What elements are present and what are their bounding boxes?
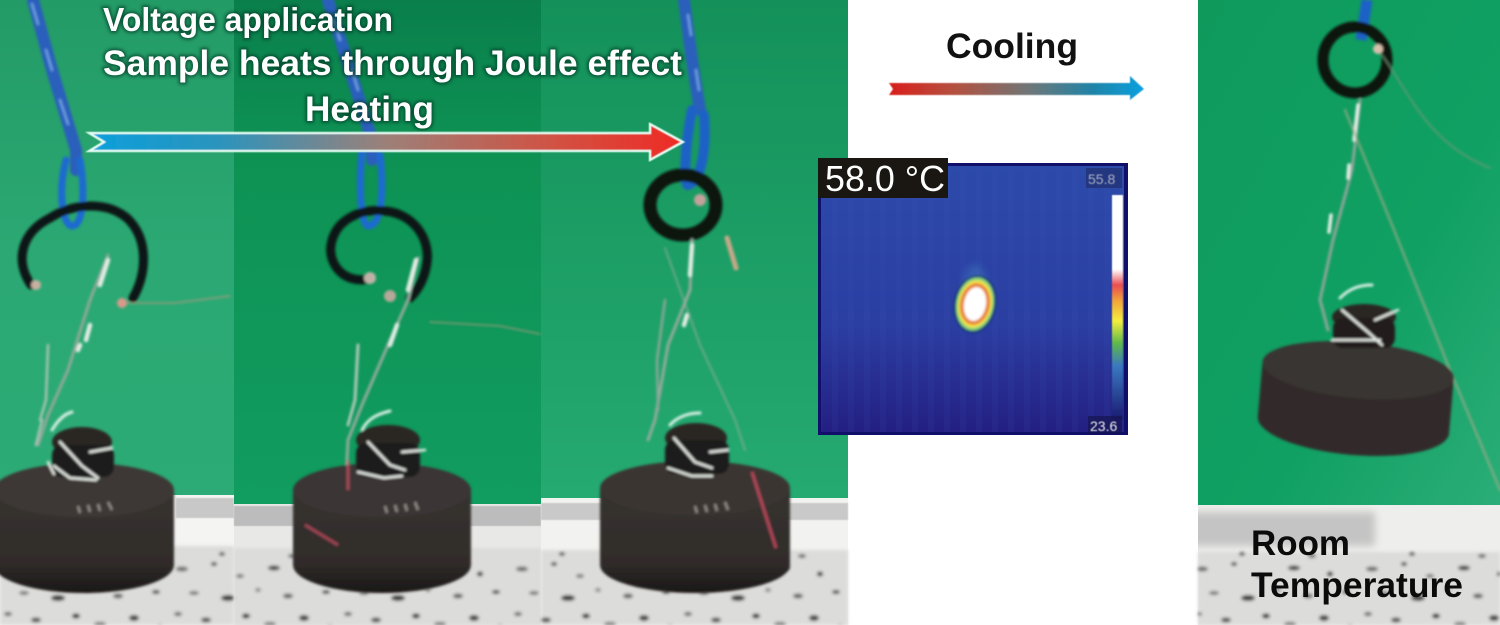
weight xyxy=(600,490,790,593)
red laser streak xyxy=(752,472,776,548)
black ring wire xyxy=(331,211,427,298)
heading: voltage application text: Sample heats through Joule effect xyxy=(103,43,682,83)
blue cord xyxy=(32,0,83,226)
panel: room temperature photo background xyxy=(1180,0,1500,625)
knob and coils xyxy=(48,427,114,480)
black ring wire xyxy=(22,206,144,298)
panel: stage 1 photo background xyxy=(0,0,234,625)
heading: voltage application text: Sample heats through Joule effect xyxy=(103,43,682,83)
silver wires xyxy=(648,194,745,450)
blue cord xyxy=(1361,0,1367,40)
heading: heating label: Heating xyxy=(305,90,434,129)
knob and coils xyxy=(356,425,425,478)
heading: heating label: Heating xyxy=(305,90,434,129)
stage 2: hanging sample xyxy=(293,0,540,593)
weight xyxy=(293,490,471,593)
weight xyxy=(0,490,174,593)
label: room temperature: Temperature xyxy=(1251,566,1463,605)
stage 3: hanging sample xyxy=(600,0,790,593)
red laser streak xyxy=(305,460,348,545)
arrow: heating xyxy=(89,124,683,160)
knob and coils xyxy=(1332,304,1398,348)
heading: voltage application text: Voltage application xyxy=(103,1,393,38)
temperature readout: 58.0 °C xyxy=(825,158,945,199)
silver wires xyxy=(31,255,230,445)
silver wires xyxy=(1320,44,1500,490)
blue cord xyxy=(684,0,705,185)
room temperature: hanging sample xyxy=(1255,0,1500,490)
black closed ring xyxy=(1323,27,1387,93)
arrow: cooling xyxy=(889,76,1144,100)
heading: voltage application text xyxy=(103,1,682,83)
heading: cooling label: Cooling xyxy=(946,26,1078,66)
colour scale bar: 55.8 xyxy=(1088,171,1115,187)
hot spot xyxy=(949,264,1001,336)
tilted weight xyxy=(1255,334,1456,463)
colour scale bar: 23.6 xyxy=(1090,418,1117,434)
stage 1: hanging sample xyxy=(0,0,230,593)
black closed ring xyxy=(650,175,716,235)
label: room temperature xyxy=(1251,524,1463,605)
label: room temperature: Room xyxy=(1251,524,1350,563)
panel: thermal camera image xyxy=(818,158,1128,435)
silver wires xyxy=(346,258,540,480)
colour scale bar xyxy=(1086,168,1123,434)
knob and coils xyxy=(665,423,729,476)
panel: stage 3 photo background xyxy=(541,0,848,625)
heading: voltage application text: Voltage application xyxy=(103,1,393,38)
panel: stage 2 photo background xyxy=(234,0,541,625)
blue cord xyxy=(328,0,382,226)
